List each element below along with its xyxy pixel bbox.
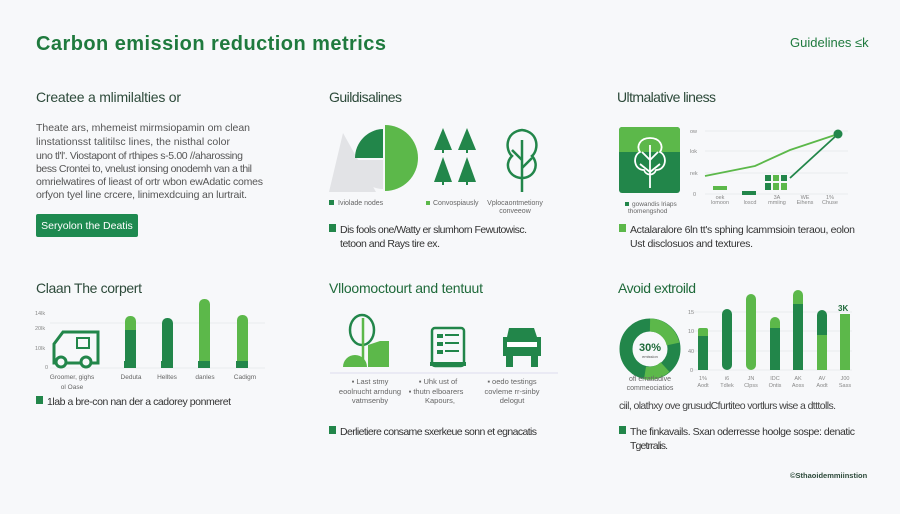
top right link: Guidelines ≤k — [790, 35, 869, 50]
heading: development: Vlloomoctourt and tentuut — [329, 280, 483, 296]
bar chart: avoid: IDC — [770, 376, 780, 382]
text block: intro paragraph: omrielwatires of lieast of ortr wbon ewAdatic comes — [36, 176, 263, 188]
text block: avoid: ciil, olathxy ove grusudCfurtiteo vortlurs wise a dtttolls. — [619, 400, 836, 412]
bar chart: avoid: i6 — [725, 376, 729, 382]
bullet: cumulative: Actalaralore 6ln tt's sphing lcammsioin teraou, eolon — [630, 224, 855, 236]
legend: guidelines: Iviolade nodes — [338, 200, 384, 207]
icon: bus — [54, 332, 98, 367]
heading: intro: Createe a mlimilalties or — [36, 89, 181, 105]
bar chart: clean: Cadigm — [234, 374, 256, 381]
labels: development: vatmsenby — [352, 396, 388, 405]
bar chart: avoid: 0 — [690, 368, 693, 374]
bullet: guidelines — [329, 224, 527, 250]
panel: development — [329, 280, 558, 438]
text block: intro paragraph: uno tl'l'. Viostapont of rthipes s-5.00 //aharossing — [36, 150, 243, 162]
bar chart: clean: Deduta — [121, 374, 142, 381]
bar chart: clean: 20lk — [35, 326, 45, 332]
bar chart: clean: 10lk — [35, 346, 45, 352]
bar chart: avoid: 3K — [838, 304, 848, 313]
text block: intro paragraph: bess Crontei to, vnelust ionsing onodemh van a thil — [36, 163, 252, 175]
bar chart: avoid: AV — [819, 376, 826, 382]
line chart — [690, 129, 848, 206]
line chart: rek — [690, 171, 698, 177]
icon: document — [430, 328, 466, 366]
line chart: lok — [690, 149, 697, 155]
legend: guidelines: Vplocaontmetiony — [487, 200, 543, 207]
bar chart: avoid: Ontis — [769, 383, 782, 389]
button: Seryolon the Deatis — [41, 220, 133, 232]
bar chart: avoid: 10 — [688, 329, 694, 335]
icon: trees — [434, 128, 476, 185]
labels: development: covleme rr-sinby — [484, 387, 540, 396]
line chart: Eihens — [797, 200, 814, 206]
legend: cumulative — [625, 201, 678, 215]
panel: cumulative lines — [617, 89, 855, 250]
icon: leaf — [508, 130, 536, 192]
pie chart — [329, 125, 418, 192]
bar chart: clean: danles — [195, 374, 215, 381]
bar chart: clean: Groomer, gighs — [50, 374, 95, 381]
panel: guidelines — [329, 89, 543, 250]
bullet: guidelines: Dis fools one/Watty er slumhorn Fewutowisc. — [340, 224, 527, 236]
line chart: WE — [801, 195, 810, 201]
bar chart: clean: 0 — [45, 365, 48, 371]
heading: cumulative: Ultmalative liness — [617, 89, 716, 105]
line chart: oek — [716, 195, 725, 201]
bullet: avoid: Tgetrralis. — [630, 440, 668, 452]
labels: development: Kapours, — [425, 396, 455, 405]
legend: guidelines: conveeow — [499, 208, 532, 215]
bar chart: avoid: JN — [748, 376, 754, 382]
bar chart: avoid: AK — [794, 376, 802, 382]
bar chart: clean: 14lk — [35, 311, 45, 317]
line chart: 0 — [693, 192, 696, 198]
donut chart — [626, 325, 674, 392]
bullet: avoid: The finkavails. Sxan oderresse hoolge sospe: denatic — [630, 426, 855, 438]
labels: development: ▪ Uhk ust of — [419, 377, 458, 386]
labels: development — [339, 377, 540, 405]
bar chart: avoid — [688, 290, 852, 389]
labels: development: delogut — [500, 396, 525, 405]
line chart: Chuse — [822, 200, 838, 206]
line chart: mmiing — [768, 200, 786, 206]
icon: vehicle — [503, 328, 541, 367]
bullet: development: Derlietiere consame sxerkeue sonn et egnacatis — [340, 426, 537, 438]
footer: ©Sthaoidemmiinstion — [790, 471, 868, 480]
icon: tree square — [619, 127, 680, 193]
legend: cumulative: gowandis lriaps — [632, 201, 678, 208]
text block: intro paragraph — [36, 122, 263, 201]
labels: development: ▪ Last stmy — [352, 377, 389, 386]
line chart: 1% — [826, 195, 834, 201]
bar chart: avoid: J00 — [841, 376, 849, 382]
icon: plant — [343, 315, 389, 367]
text block: intro paragraph: Theate ars, mhemeist mirmsiopamin om clean — [36, 122, 250, 134]
text block: intro paragraph: orfyon tyel line crcere, linimexdcuing an lurtrait. — [36, 189, 247, 201]
legend: guidelines: Convospiausly — [433, 200, 479, 207]
bar chart: avoid: 15 — [688, 310, 694, 316]
line chart: 3A — [774, 195, 781, 201]
bar chart: avoid: Sass — [839, 383, 851, 389]
bar chart: clean: Helltes — [157, 374, 178, 381]
bar chart: avoid: Tdlek — [720, 383, 734, 389]
bar chart: clean: ol Oase — [61, 384, 84, 391]
bar chart: avoid: Aodt — [697, 383, 709, 389]
donut chart: 30% — [639, 342, 661, 354]
line chart: loscd — [744, 200, 756, 206]
heading: avoid: Avoid extroild — [618, 280, 696, 296]
bullet: avoid — [619, 426, 855, 452]
bullet: guidelines: tetoon and Rays tire ex. — [340, 238, 440, 250]
panel: clean report — [35, 280, 265, 408]
legend: guidelines — [329, 200, 543, 215]
panel: intro — [36, 89, 263, 237]
donut chart: ofl erratladive — [629, 376, 671, 383]
heading: guidelines: Guildisalines — [329, 89, 402, 105]
labels: development: ▪ oedo testings — [487, 377, 537, 386]
title: Carbon emission reduction metrics — [36, 33, 386, 55]
bullet: cumulative — [619, 224, 855, 250]
bullet: clean: 1lab a bre-con nan der a cadorey ponmeret — [47, 396, 231, 408]
bar chart: clean — [35, 299, 265, 391]
donut chart: commeociatios — [627, 385, 674, 392]
bar chart: avoid: Aodt — [816, 383, 828, 389]
bullet: cumulative: Ust disclosuos and textures. — [630, 238, 753, 250]
text block: intro paragraph: linstationsst talitilsc lines, the nisthal color — [36, 136, 230, 148]
labels: development: eoolnucht arndung — [339, 387, 401, 396]
line chart: ow — [690, 129, 697, 135]
heading: clean: Claan The corpert — [36, 280, 142, 296]
button — [36, 214, 138, 237]
donut chart: emission — [642, 354, 658, 359]
bar chart: avoid: Aoss — [792, 383, 804, 389]
line chart: lomoon — [711, 200, 729, 206]
bar chart: avoid: Clpss — [744, 383, 758, 389]
bar chart: avoid: 1% — [699, 376, 707, 382]
bar chart: avoid: 40 — [688, 349, 694, 355]
labels: development: ▪ thutn elboarers — [409, 387, 464, 396]
legend: cumulative: thomengshod — [628, 208, 668, 215]
panel: avoid — [618, 280, 855, 452]
